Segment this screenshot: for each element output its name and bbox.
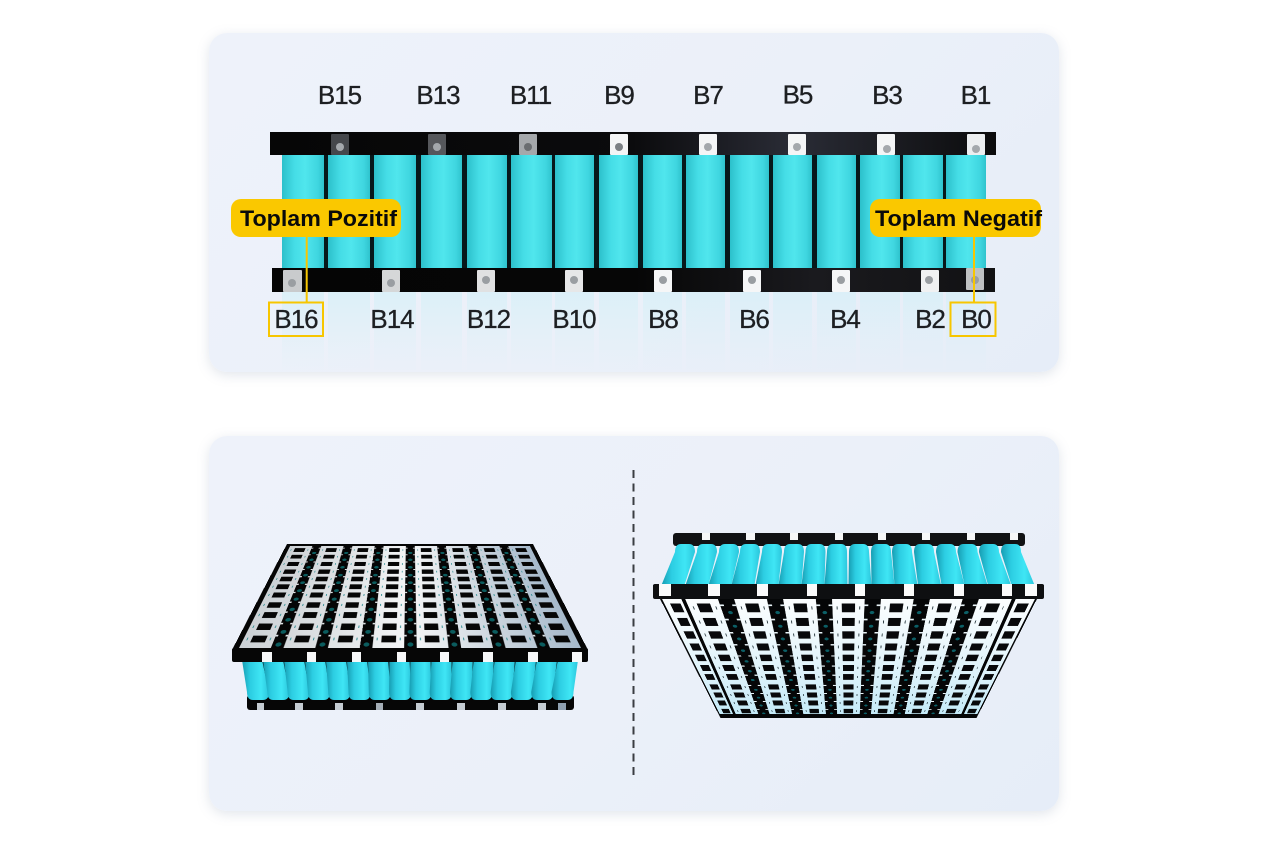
callout: total negative	[870, 199, 1043, 336]
odd terminal labels: B11	[510, 80, 552, 110]
top holder bar with odd terminals	[270, 132, 996, 155]
even terminal labels: B6	[739, 304, 769, 334]
right module: front holder bar	[653, 584, 1044, 599]
odd terminal labels: B5	[783, 80, 813, 110]
callout: total negative: Toplam Negatif	[875, 206, 1043, 231]
even terminal labels: B12	[467, 304, 511, 334]
odd terminal labels: B13	[416, 80, 460, 110]
left module: front holder bar	[232, 648, 588, 662]
panel: front view background	[209, 33, 1059, 372]
left module: cylindrical cells	[242, 660, 578, 700]
right module: cylindrical cells	[662, 544, 1034, 585]
callout: total positive: Toplam Pozitif	[240, 206, 398, 231]
even terminal labels: B10	[552, 304, 596, 334]
odd terminal labels: B3	[872, 80, 902, 110]
odd terminal labels: B1	[961, 80, 991, 110]
odd terminal labels	[318, 80, 991, 110]
panel: perspective views background	[209, 436, 1059, 811]
left module: lower holder bar	[247, 695, 574, 710]
even terminal labels: B2	[915, 304, 945, 334]
left module: top face with nickel strips	[232, 544, 588, 650]
even terminal labels	[274, 304, 991, 334]
battery cells	[282, 155, 986, 268]
right module: rear holder bar	[673, 533, 1025, 546]
right module: bottom face with nickel strips	[653, 585, 1044, 718]
even terminal labels: B16	[274, 304, 318, 334]
callout: total positive	[231, 199, 401, 336]
even terminal labels: B14	[370, 304, 414, 334]
even terminal labels: B4	[830, 304, 860, 334]
odd terminal labels: B15	[318, 80, 362, 110]
even terminal labels: B0	[961, 304, 991, 334]
odd terminal labels: B9	[604, 80, 634, 110]
odd terminal labels: B7	[693, 80, 723, 110]
even terminal labels: B8	[648, 304, 678, 334]
floor reflections	[282, 292, 986, 370]
divider: dashed line between views	[632, 470, 634, 778]
bottom holder bar with even terminals	[272, 268, 995, 292]
